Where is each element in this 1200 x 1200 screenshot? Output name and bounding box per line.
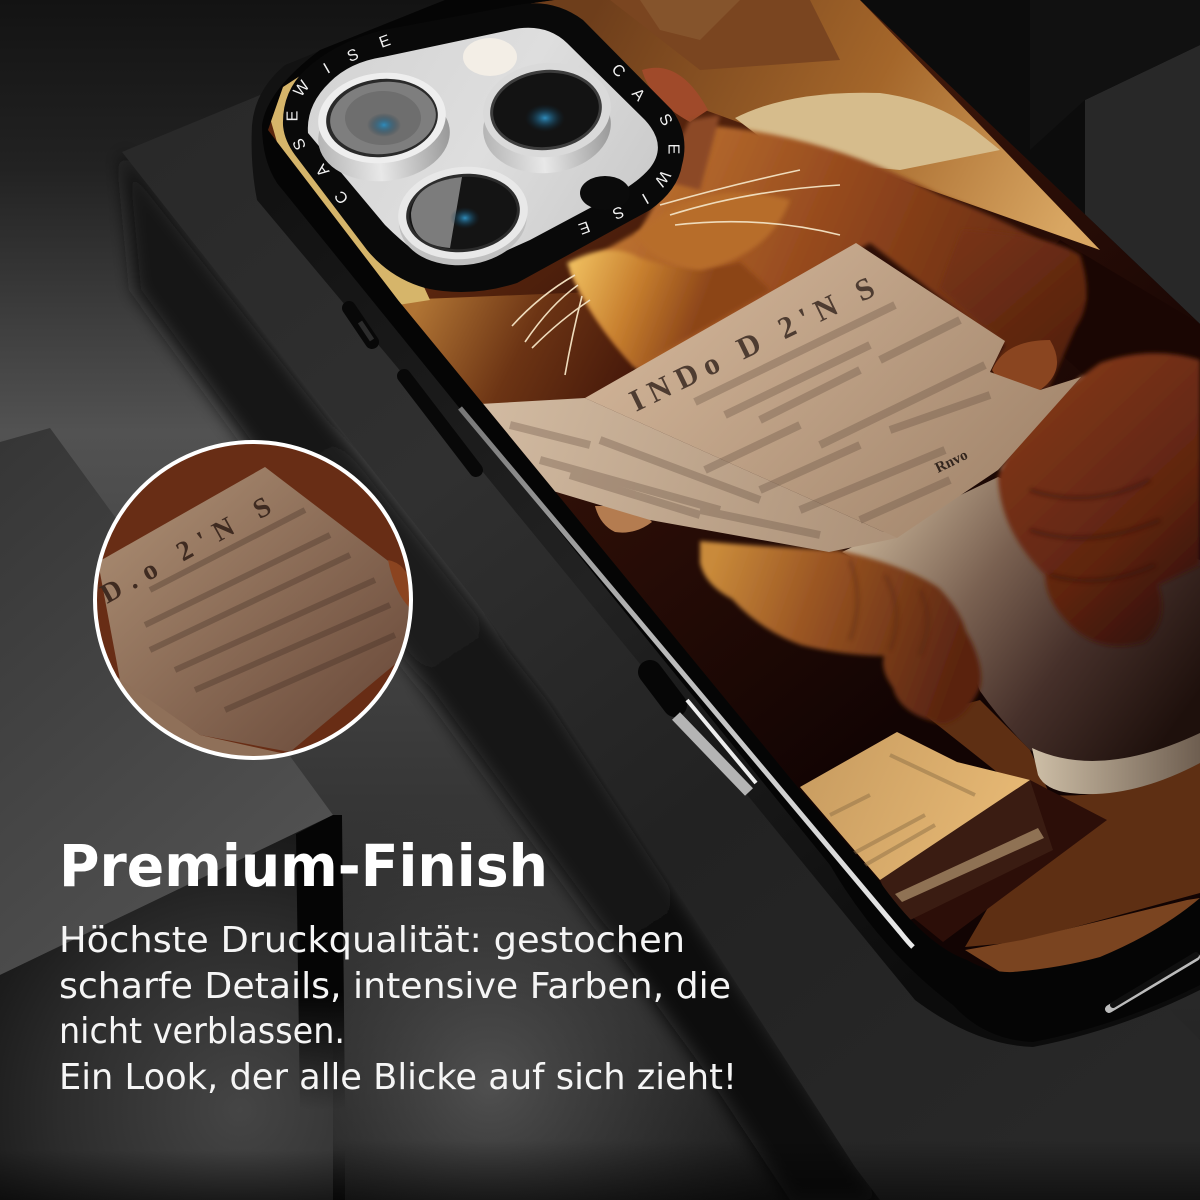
brand ring lettering: E	[664, 144, 682, 154]
brand ring lettering	[284, 32, 682, 237]
camera module	[283, 3, 684, 292]
dark cavity right of arm	[1057, 240, 1108, 284]
brand ring lettering: A	[313, 160, 333, 179]
brand ring lettering: S	[290, 136, 310, 152]
phone screen artwork: cat reading a newspaper	[250, 0, 1200, 1000]
open books on floor	[800, 732, 1107, 942]
brand ring lettering: S	[655, 111, 675, 129]
brand ring lettering: C	[608, 61, 628, 81]
newspaper small title: Rnvo	[933, 447, 970, 477]
lens one	[314, 67, 454, 188]
brand ring lettering: S	[345, 46, 361, 66]
body copy: Höchste Druckqualität: gestochen	[59, 920, 685, 961]
brand ring lettering: C	[332, 187, 352, 207]
brand ring lettering: I	[321, 61, 333, 77]
newspaper headline: INDo D 2'N S	[624, 269, 880, 418]
body copy: scharfe Details, intensive Farben, die	[59, 966, 731, 1007]
charging port	[1109, 955, 1196, 1009]
side buttons	[349, 308, 756, 792]
whiskers	[512, 170, 840, 375]
magnified headline: D.o 2'N S	[95, 491, 277, 610]
lower left block	[0, 428, 345, 1200]
wooden wall	[262, 0, 1100, 405]
brand ring lettering: W	[291, 77, 314, 100]
heading: Premium-Finish	[59, 832, 548, 900]
toilet lid	[735, 93, 1000, 170]
brand ring lettering: A	[628, 85, 648, 105]
body copy: nicht verblassen.	[59, 1011, 345, 1052]
phone case body	[252, 0, 1200, 1047]
brand ring lettering: E	[377, 32, 393, 52]
arm and paw	[974, 236, 1089, 390]
newspaper	[480, 243, 1081, 552]
wood floor	[965, 898, 1200, 980]
cat ear	[642, 68, 708, 122]
brand ring lettering: W	[650, 167, 673, 190]
cat body	[570, 125, 1085, 372]
toilet bowl	[842, 477, 1200, 761]
cat haunch and hind paw	[998, 353, 1200, 646]
body copy	[59, 920, 737, 1098]
brand ring lettering: S	[610, 202, 626, 222]
lens two	[478, 57, 616, 179]
flash	[463, 38, 517, 76]
brand ring lettering: E	[576, 217, 592, 237]
brand ring lettering: E	[284, 111, 302, 121]
small front paw	[595, 506, 652, 533]
toilet base rim	[1032, 733, 1200, 794]
lidar sensor	[580, 176, 630, 210]
lens three	[394, 160, 532, 271]
body copy: Ein Look, der alle Blicke auf sich zieht!	[59, 1057, 737, 1098]
screen edge highlight	[460, 408, 913, 947]
brand ring lettering: I	[639, 190, 651, 206]
magnifier circle: newspaper detail	[90, 440, 420, 770]
cat front leg	[700, 541, 981, 724]
carpet	[925, 700, 1200, 947]
camera glass	[308, 28, 658, 262]
